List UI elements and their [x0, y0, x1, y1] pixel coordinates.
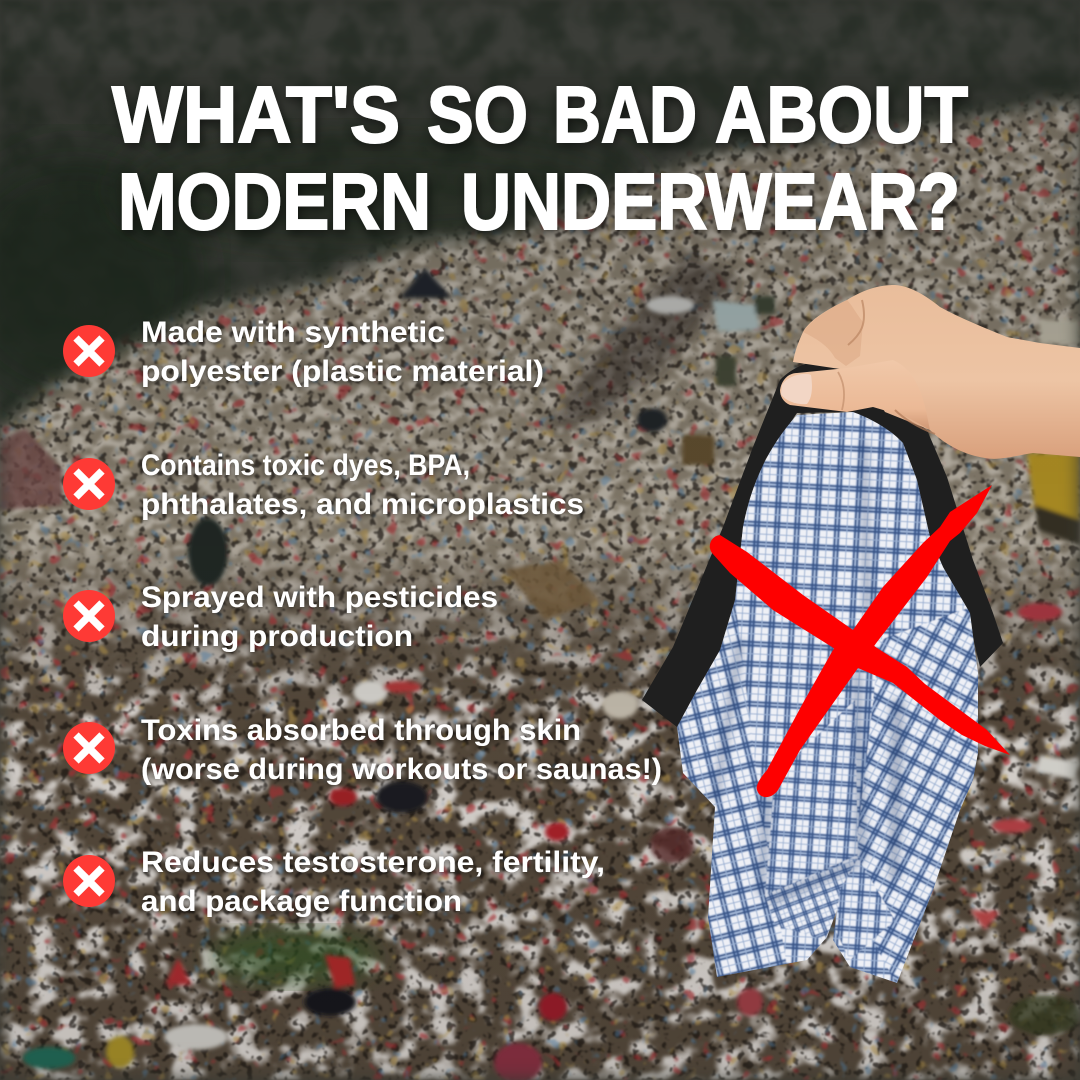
text: toxic dyes — [141, 449, 584, 521]
text: toxins absorbed — [141, 714, 662, 786]
text: pesticides — [141, 581, 498, 653]
red cross-out mark — [710, 485, 1010, 797]
text: toxic dyes: phthalates, and microplastics — [141, 488, 584, 521]
hand — [780, 285, 1080, 459]
title: WHAT'S — [112, 70, 400, 159]
icon: red cross badge — [63, 722, 115, 774]
text: synthetic polyester — [141, 316, 544, 388]
icon: red cross badge — [63, 458, 115, 510]
text: testosterone: Reduces testosterone, fertility, — [141, 846, 605, 879]
plaid fabric — [677, 412, 978, 983]
title: MODERN — [118, 157, 431, 246]
icon: red cross badge — [63, 590, 115, 642]
icon: red cross badge — [63, 325, 115, 377]
text: synthetic polyester: Made with synthetic — [141, 316, 445, 349]
title: BAD — [553, 70, 697, 159]
waistband — [642, 360, 1003, 727]
text: pesticides: during production — [141, 620, 413, 653]
list item 3: pesticides — [63, 581, 498, 653]
text: pesticides: Sprayed with pesticides — [141, 581, 498, 614]
title — [112, 70, 968, 246]
text: toxic dyes: Contains toxic dyes, BPA, — [141, 449, 470, 482]
text: testosterone — [141, 846, 605, 918]
icon: red cross badge — [63, 855, 115, 907]
list item 5: testosterone — [63, 846, 605, 918]
list item 2: toxic dyes — [63, 449, 584, 521]
list item 4: toxins absorbed — [63, 714, 662, 786]
text: toxins absorbed: (worse during workouts or saunas!) — [141, 753, 662, 786]
text: testosterone: and package function — [141, 885, 462, 918]
list item 1: synthetic polyester — [63, 316, 544, 388]
illustration: hand holding plaid boxers — [642, 285, 1080, 1000]
title: SO — [427, 70, 528, 159]
title: ABOUT — [715, 70, 968, 159]
text: synthetic polyester: polyester (plastic material) — [141, 355, 544, 388]
title: UNDERWEAR? — [461, 157, 960, 246]
text: toxins absorbed: Toxins absorbed through skin — [141, 714, 581, 747]
